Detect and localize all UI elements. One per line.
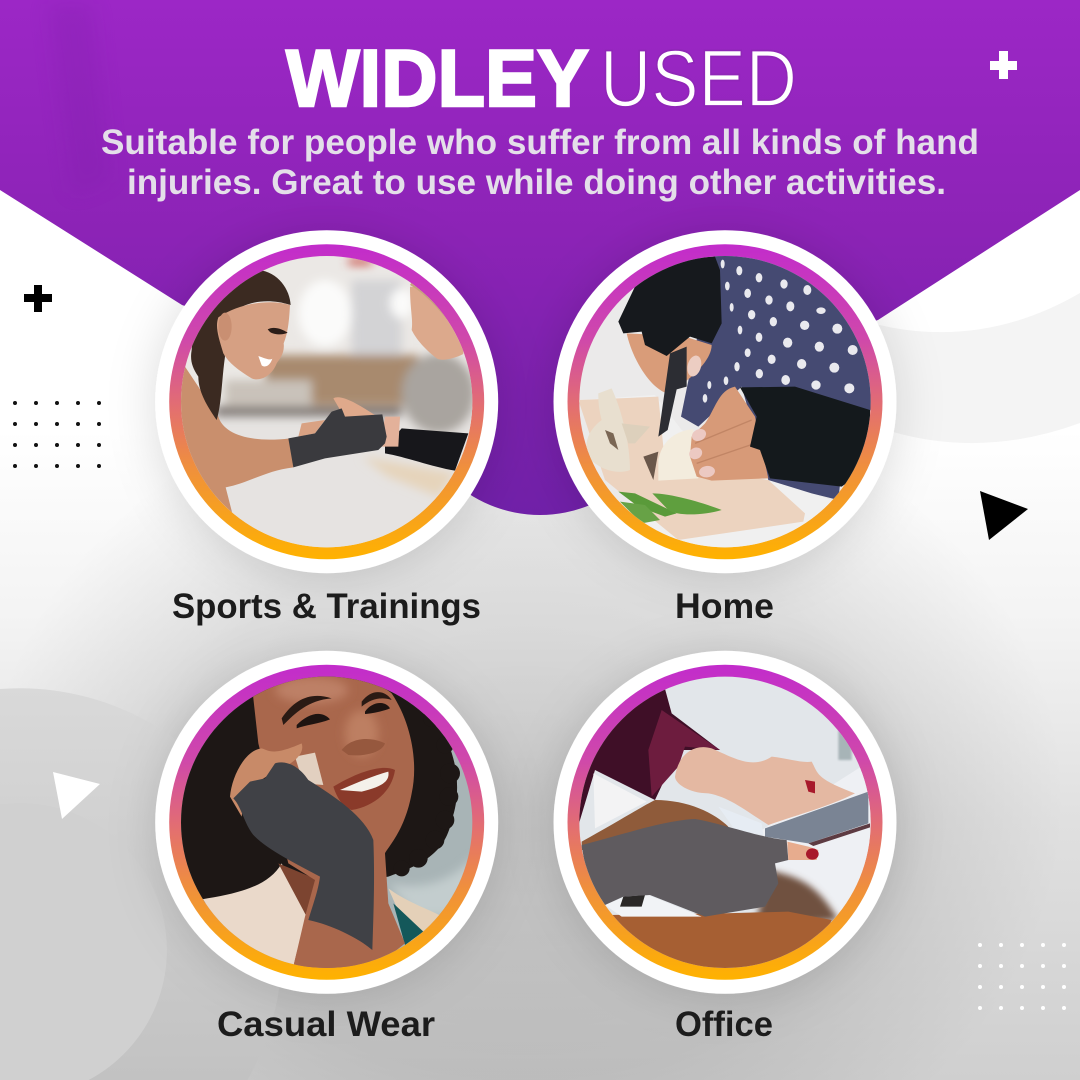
panel: sports and trainings [155, 230, 500, 575]
photo: hands in gloves cutting mushrooms [579, 256, 871, 548]
subtitle: Suitable for people who suffer from all kinds of hand [101, 123, 979, 162]
subtitle: injuries. Great to use while doing other activities. [127, 163, 946, 202]
label: office: Office [675, 1005, 773, 1044]
purple header banner [0, 0, 1080, 515]
panel: office [554, 650, 900, 995]
icon: white plus [990, 51, 1017, 79]
icon: white triangle [53, 772, 100, 819]
icon: black triangle [980, 491, 1028, 540]
panel: home [554, 230, 900, 575]
title: WIDLEY [286, 34, 589, 124]
icon: black plus [24, 285, 52, 312]
icon: white dot grid [978, 943, 1066, 1010]
icon: black dot grid [13, 401, 101, 468]
label: home: Home [675, 587, 774, 626]
label: casual wear: Casual Wear [217, 1005, 435, 1044]
subtitle [101, 123, 979, 202]
photo: smiling woman on phone wearing glove [181, 676, 472, 968]
title [286, 34, 797, 124]
photo: gloved hand on tablet [579, 676, 871, 968]
panel: casual wear [155, 650, 500, 995]
photo: women with glove handshake [181, 256, 472, 548]
title: USED [600, 34, 797, 124]
label: sports and trainings: Sports & Trainings [172, 587, 481, 626]
